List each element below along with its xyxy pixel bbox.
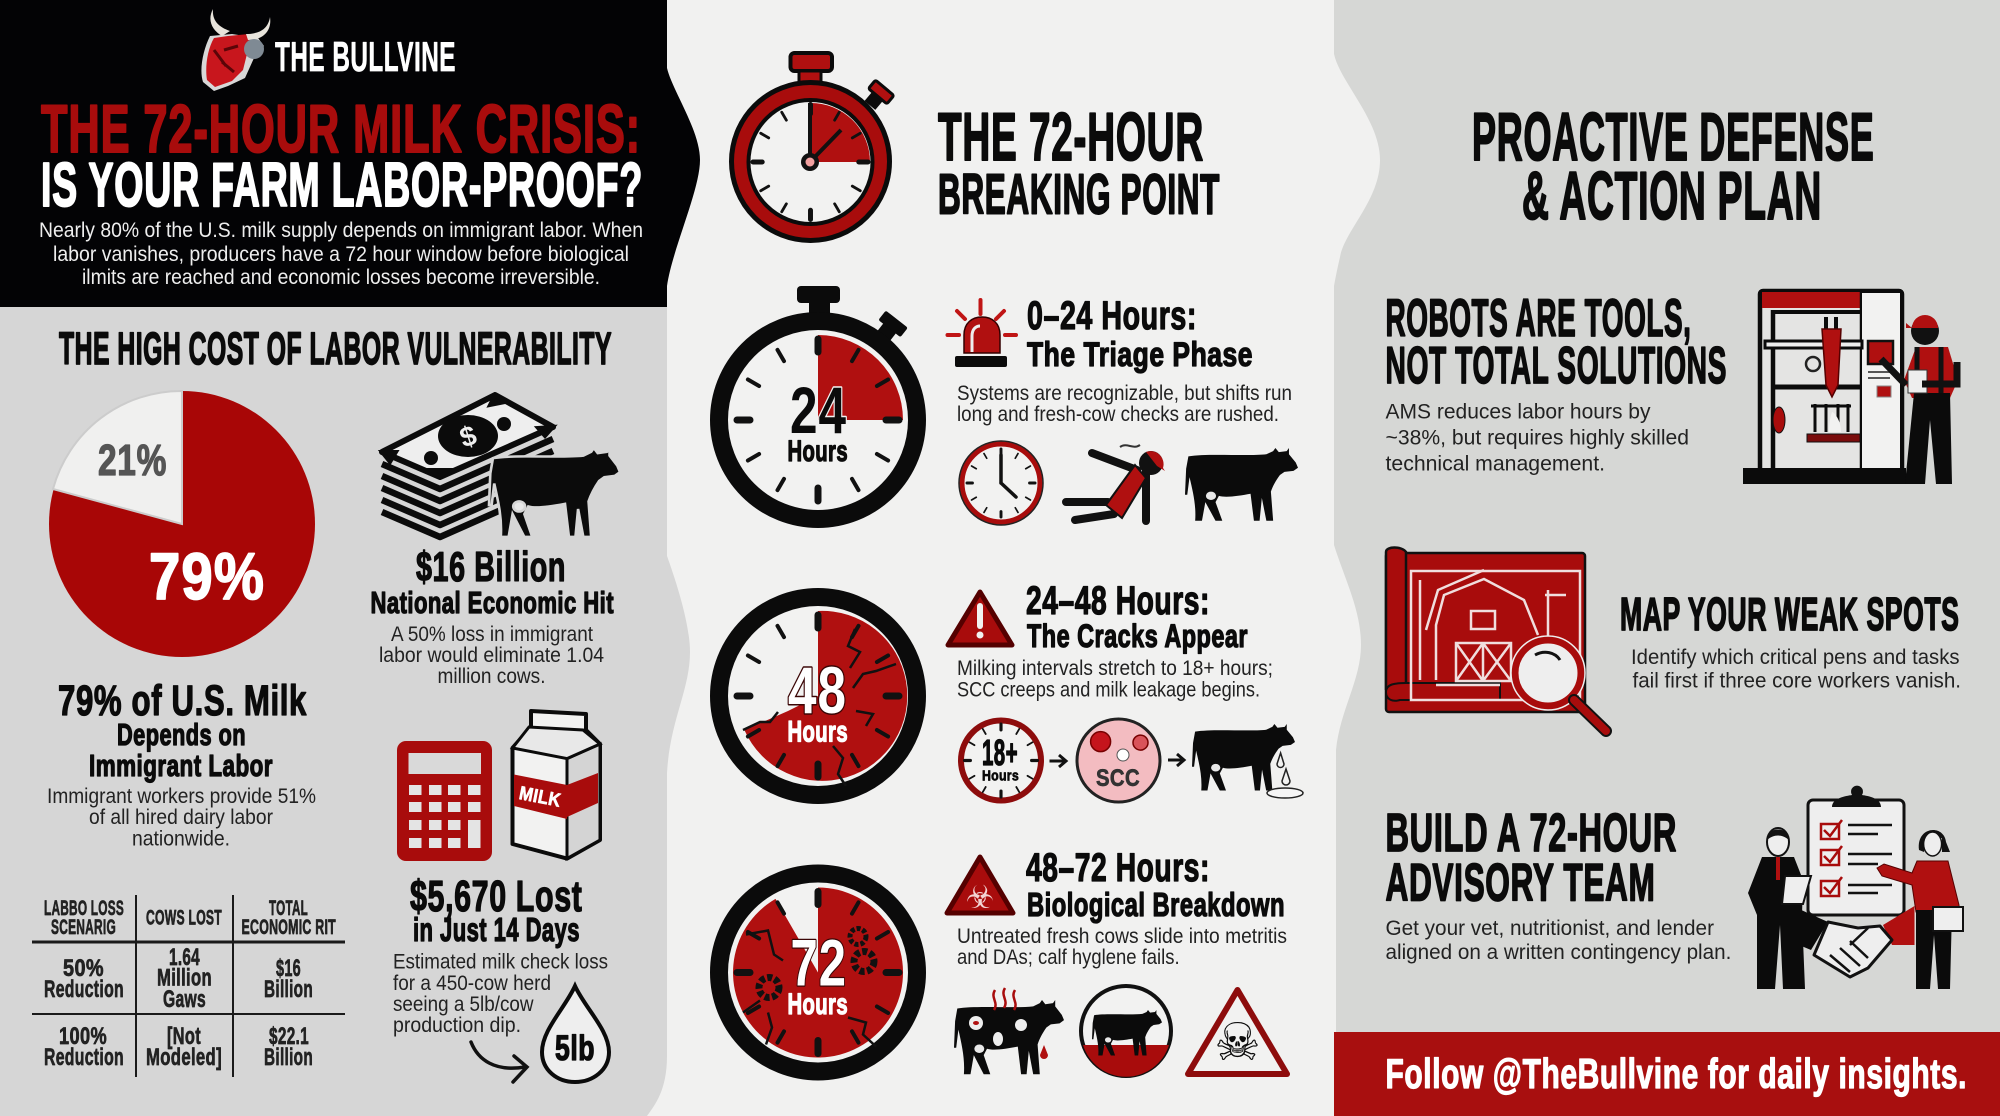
panel: proactive defense <box>1334 0 2000 1116</box>
heading: BREAKING POINT <box>938 163 1220 227</box>
data table: Modeled] <box>146 1044 222 1071</box>
stopwatch: 24 hours: Hours <box>788 435 848 468</box>
data table: $22.1 <box>269 1023 309 1050</box>
icon: bull logo <box>201 9 270 91</box>
block: map weak spots <box>1620 588 1961 693</box>
data table: Reduction <box>44 1044 124 1071</box>
icon: warning triangle <box>948 592 1012 645</box>
data table: COWS LOST <box>146 906 222 930</box>
block: map weak spots: Identify which critical pens and tasks <box>1631 645 1960 669</box>
stat: 5670 lost: Estimated milk check loss <box>393 950 608 974</box>
icon: cow <box>1185 448 1298 521</box>
stat: 5670 lost: for a 450-cow herd <box>393 971 551 995</box>
stat: 16 billion: A 50% loss in immigrant <box>391 622 593 646</box>
phase 3 text: and DAs; calf hyglene fails. <box>957 945 1180 969</box>
icon: 18+ hours clock: 18+ <box>982 732 1018 773</box>
stopwatch: 72 hours <box>719 874 917 1072</box>
phase 2 text: The Cracks Appear <box>1027 618 1248 654</box>
stopwatch: 48 hours: 48 <box>788 653 847 727</box>
logo wordmark: THE BULLVINE <box>275 33 456 80</box>
icon: barn blueprint with magnifier <box>1386 548 1606 731</box>
stat: 16 billion: million cows. <box>438 664 546 688</box>
pie chart <box>49 391 315 657</box>
phase 1 text: long and fresh-cow checks are rushed. <box>957 402 1279 426</box>
stat: 16 billion: $16 Billion <box>416 543 566 590</box>
phase 1 text <box>948 294 1292 426</box>
icon: milk drop 5lb <box>542 986 609 1082</box>
data table: 50% <box>63 955 104 982</box>
data table: Billion <box>264 1044 313 1071</box>
footer call to action <box>1334 1032 2000 1116</box>
phase 1 text: Systems are recognizable, but shifts run <box>957 381 1292 405</box>
block: robots text: ~38%, but requires highly skilled <box>1386 426 1689 450</box>
icon: red stopwatch <box>732 53 894 240</box>
data table: SCENARIG <box>51 916 116 939</box>
icon: sick cow <box>954 988 1064 1074</box>
icon: SCC cell: SCC <box>1096 765 1140 792</box>
title <box>41 91 643 220</box>
phase 2 text: Milking intervals stretch to 18+ hours; <box>957 656 1273 680</box>
phase 2 text <box>948 579 1273 702</box>
icon: milk carton: MILK <box>517 783 563 812</box>
icon: money stack and cow: $ <box>456 419 481 454</box>
icon: cow in mud <box>1081 986 1171 1077</box>
block: advisory team: ADVISORY TEAM <box>1386 853 1656 912</box>
stopwatch: 24 hours <box>719 286 917 519</box>
icon: siren <box>948 300 1016 367</box>
stat: 5670 lost: in Just 14 Days <box>413 911 580 948</box>
stopwatch: 72 hours: 72 <box>790 926 847 1000</box>
pie chart: 21% <box>98 436 167 485</box>
phase 2 text: SCC creeps and milk leakage begins. <box>957 678 1260 702</box>
phase 2 text: 24–48 Hours: <box>1026 579 1210 623</box>
data table: $16 <box>276 955 301 982</box>
stat: 79 percent: 79% of U.S. Milk <box>58 677 307 725</box>
stopwatch: 48 hours: Hours <box>788 716 848 748</box>
stat: 16 billion: National Economic Hit <box>370 585 614 620</box>
stat: 5670 lost: seeing a 5lb/cow <box>393 992 534 1016</box>
stat: 5670 lost <box>393 872 608 1037</box>
icon: hazard triangle skull <box>1188 990 1287 1074</box>
block: robots text: technical management. <box>1386 452 1605 476</box>
icon: money stack and cow <box>382 395 620 537</box>
data table: 100% <box>59 1023 107 1050</box>
block: robots text: NOT TOTAL SOLUTIONS <box>1386 337 1727 395</box>
icon: wall clock <box>959 441 1043 525</box>
phase 1 text: The Triage Phase <box>1027 336 1253 374</box>
phase 3 text: Biological Breakdown <box>1027 886 1285 923</box>
stat: 79 percent: Depends on <box>117 717 246 752</box>
panel: 72-hour breaking point <box>719 53 1303 1077</box>
icon: collapsing worker <box>1066 445 1165 521</box>
block: robots text <box>1386 289 1727 476</box>
data table: Billion <box>264 976 313 1003</box>
heading <box>1472 99 1874 234</box>
data table: [Not <box>167 1023 201 1050</box>
heading <box>938 99 1220 227</box>
pie chart: 79% <box>149 539 265 613</box>
icon: milk drop 5lb: 5lb <box>555 1029 595 1068</box>
block: robots text: AMS reduces labor hours by <box>1386 400 1651 424</box>
phase 3 text <box>947 846 1287 969</box>
stopwatch: 72 hours: Hours <box>788 988 848 1021</box>
stat: 16 billion: labor would eliminate 1.04 <box>379 643 604 667</box>
data table: Million <box>157 964 212 992</box>
panel: left header <box>0 0 700 307</box>
stat: 79 percent: nationwide. <box>132 826 230 850</box>
icon: hazard triangle skull: ☠ <box>1214 1013 1261 1073</box>
block: map weak spots: fail first if three core workers vanish. <box>1632 669 1961 693</box>
icon: team with checklist and handshake <box>1748 786 1963 989</box>
stopwatch: 48 hours <box>719 597 917 795</box>
stat: 79 percent: Immigrant workers provide 51% <box>47 784 316 808</box>
icon: leaking cow <box>1192 724 1303 798</box>
block: advisory team: aligned on a written contingency plan. <box>1386 940 1731 964</box>
phase 3 text: 48–72 Hours: <box>1026 846 1210 890</box>
icon: 18+ hours clock <box>961 720 1041 800</box>
panel: labor vulnerability <box>0 307 690 1116</box>
data table: Gaws <box>163 986 206 1013</box>
data table <box>32 895 345 1077</box>
stat: 5670 lost: production dip. <box>393 1013 521 1037</box>
phase 1 text: 0–24 Hours: <box>1027 294 1197 338</box>
stat: 16 billion <box>370 543 614 688</box>
title: IS YOUR FARM LABOR-PROOF? <box>41 151 643 220</box>
data table: 1.64 <box>169 944 200 971</box>
icon: milk carton <box>512 711 600 859</box>
icon: biohazard triangle: ☣ <box>966 878 994 916</box>
stat: 5670 lost: $5,670 Lost <box>410 872 582 921</box>
block: advisory team: Get your vet, nutritionist, and lender <box>1386 916 1714 940</box>
icon: 18+ hours clock: Hours <box>982 768 1019 784</box>
data table: TOTAL <box>269 897 308 920</box>
stat: 79 percent: Immigrant Labor <box>89 748 273 783</box>
title: THE 72-HOUR MILK CRISIS: <box>41 91 641 167</box>
heading: THE 72-HOUR <box>938 99 1204 175</box>
stat: 79 percent: of all hired dairy labor <box>89 805 273 829</box>
icon: calculator <box>397 741 492 861</box>
stopwatch: 24 hours: 24 <box>790 373 847 447</box>
intro paragraph: ilmits are reached and economic losses become irreversible. <box>82 265 600 289</box>
icon: SCC cell <box>1077 719 1160 802</box>
data table: ECONOMIC RIT <box>242 916 336 939</box>
arrow <box>1050 755 1066 767</box>
phase 3 text: Untreated fresh cows slide into metritis <box>957 924 1287 948</box>
data table: Reduction <box>44 976 124 1003</box>
heading: THE HIGH COST OF LABOR VULNERABILITY <box>59 323 612 374</box>
block: advisory team: BUILD A 72-HOUR <box>1386 803 1677 863</box>
intro paragraph <box>39 218 643 289</box>
intro paragraph: Nearly 80% of the U.S. milk supply depends on immigrant labor. When <box>39 218 643 242</box>
data table: LABBO LOSS <box>44 897 124 920</box>
block: robots text: ROBOTS ARE TOOLS, <box>1386 289 1692 348</box>
stat: 79 percent <box>47 677 316 850</box>
arrow <box>471 1042 527 1082</box>
arrow <box>1168 754 1184 766</box>
icon: biohazard triangle <box>947 857 1013 916</box>
block: advisory team <box>1386 803 1731 964</box>
icon: milking robot and worker <box>1743 291 1958 484</box>
intro paragraph: labor vanishes, producers have a 72 hour window before biological <box>53 242 629 266</box>
